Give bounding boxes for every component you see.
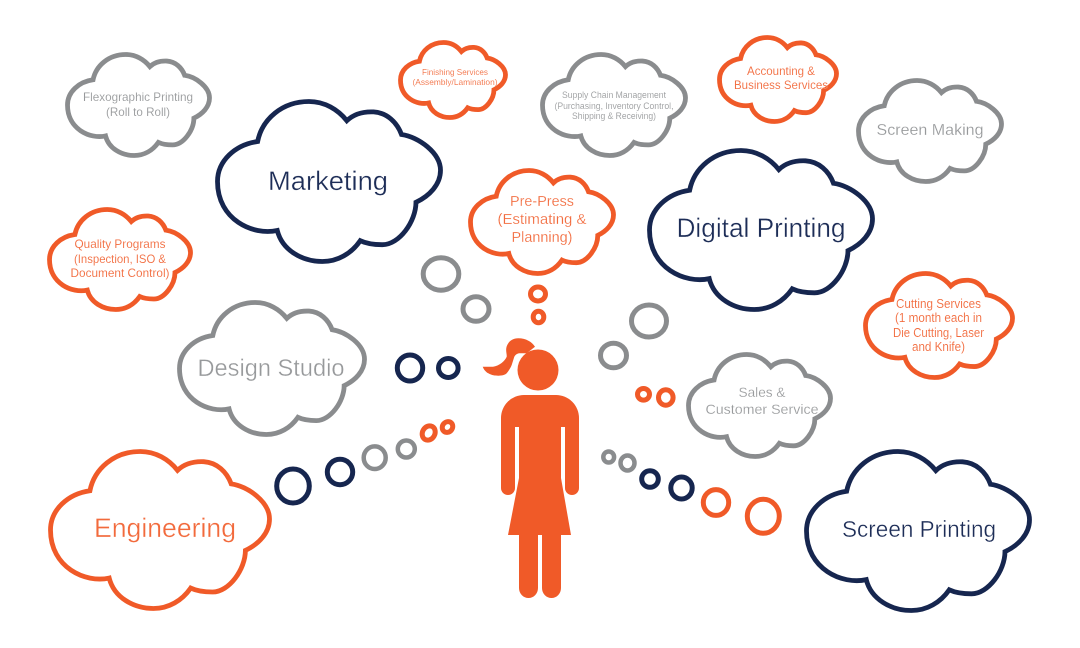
cloud: Design Studio bbox=[180, 302, 364, 434]
cloud: Cutting Services: (1 month each in bbox=[895, 311, 982, 325]
cloud: Engineering bbox=[50, 452, 270, 608]
cloud: Finishing Services bbox=[400, 42, 506, 118]
thought bubbles: toward Design Studio bbox=[397, 355, 458, 381]
icon: woman with ponytail bbox=[483, 338, 579, 598]
cloud: Sales and Customer Service: Sales & bbox=[738, 384, 786, 400]
cloud: Quality Programs: (Inspection, ISO & bbox=[74, 252, 166, 266]
cloud: Marketing: Marketing bbox=[268, 166, 388, 196]
cloud: Design Studio: Design Studio bbox=[198, 355, 344, 382]
cloud: Accounting and Business Services: Business Services bbox=[734, 78, 828, 92]
thought bubbles: toward Pre-Press bbox=[530, 287, 546, 323]
cloud: Finishing Services: (Assembly/Lamination) bbox=[412, 77, 498, 87]
cloud: Accounting and Business Services: Accounting & bbox=[747, 64, 815, 78]
cloud: Sales and Customer Service bbox=[688, 354, 830, 456]
cloud: Supply Chain Management: (Purchasing, Inventory Control, bbox=[554, 101, 674, 112]
cloud: Supply Chain Management bbox=[542, 54, 686, 156]
cloud: Quality Programs: Document Control) bbox=[70, 266, 170, 280]
cloud: Accounting and Business Services bbox=[720, 38, 836, 122]
cloud: Supply Chain Management: Supply Chain Management bbox=[562, 90, 666, 101]
cloud: Quality Programs bbox=[50, 210, 190, 310]
cloud: Screen Making: Screen Making bbox=[876, 122, 984, 139]
thought bubbles: toward Screen Printing bbox=[603, 452, 779, 533]
cloud: Flexographic Printing: (Roll to Roll) bbox=[106, 105, 170, 119]
cloud: Digital Printing: Digital Printing bbox=[676, 213, 846, 243]
thought bubbles: toward Marketing bbox=[423, 258, 489, 321]
cloud: Cutting Services: Die Cutting, Laser bbox=[893, 326, 984, 340]
cloud: Flexographic Printing bbox=[68, 54, 210, 156]
cloud: Sales and Customer Service: Customer Service bbox=[706, 401, 819, 417]
cloud: Flexographic Printing: Flexographic Printing bbox=[83, 90, 193, 104]
cloud: Screen Printing bbox=[806, 452, 1030, 610]
cloud: Supply Chain Management: Shipping & Receiving) bbox=[572, 111, 656, 122]
cloud: Screen Printing: Screen Printing bbox=[842, 516, 996, 542]
cloud: Pre-Press: Planning) bbox=[512, 229, 572, 246]
cloud: Pre-Press bbox=[470, 170, 614, 274]
cloud: Cutting Services: and Knife) bbox=[912, 340, 965, 354]
cloud: Pre-Press: (Estimating & bbox=[498, 211, 586, 228]
cloud: Digital Printing bbox=[650, 150, 872, 310]
thought bubbles: toward Digital Printing bbox=[600, 305, 666, 368]
cloud: Screen Making bbox=[858, 80, 1002, 182]
thought bubbles: toward Sales bbox=[638, 388, 673, 405]
cloud: Cutting Services bbox=[866, 274, 1012, 378]
thought bubbles: toward Engineering bbox=[277, 419, 455, 503]
cloud: Quality Programs: Quality Programs bbox=[74, 237, 166, 251]
cloud: Engineering: Engineering bbox=[94, 513, 236, 543]
cloud: Marketing bbox=[218, 102, 440, 262]
cloud: Cutting Services: Cutting Services bbox=[896, 297, 981, 311]
cloud: Finishing Services: Finishing Services bbox=[422, 67, 488, 77]
cloud: Pre-Press: Pre-Press bbox=[510, 193, 574, 210]
